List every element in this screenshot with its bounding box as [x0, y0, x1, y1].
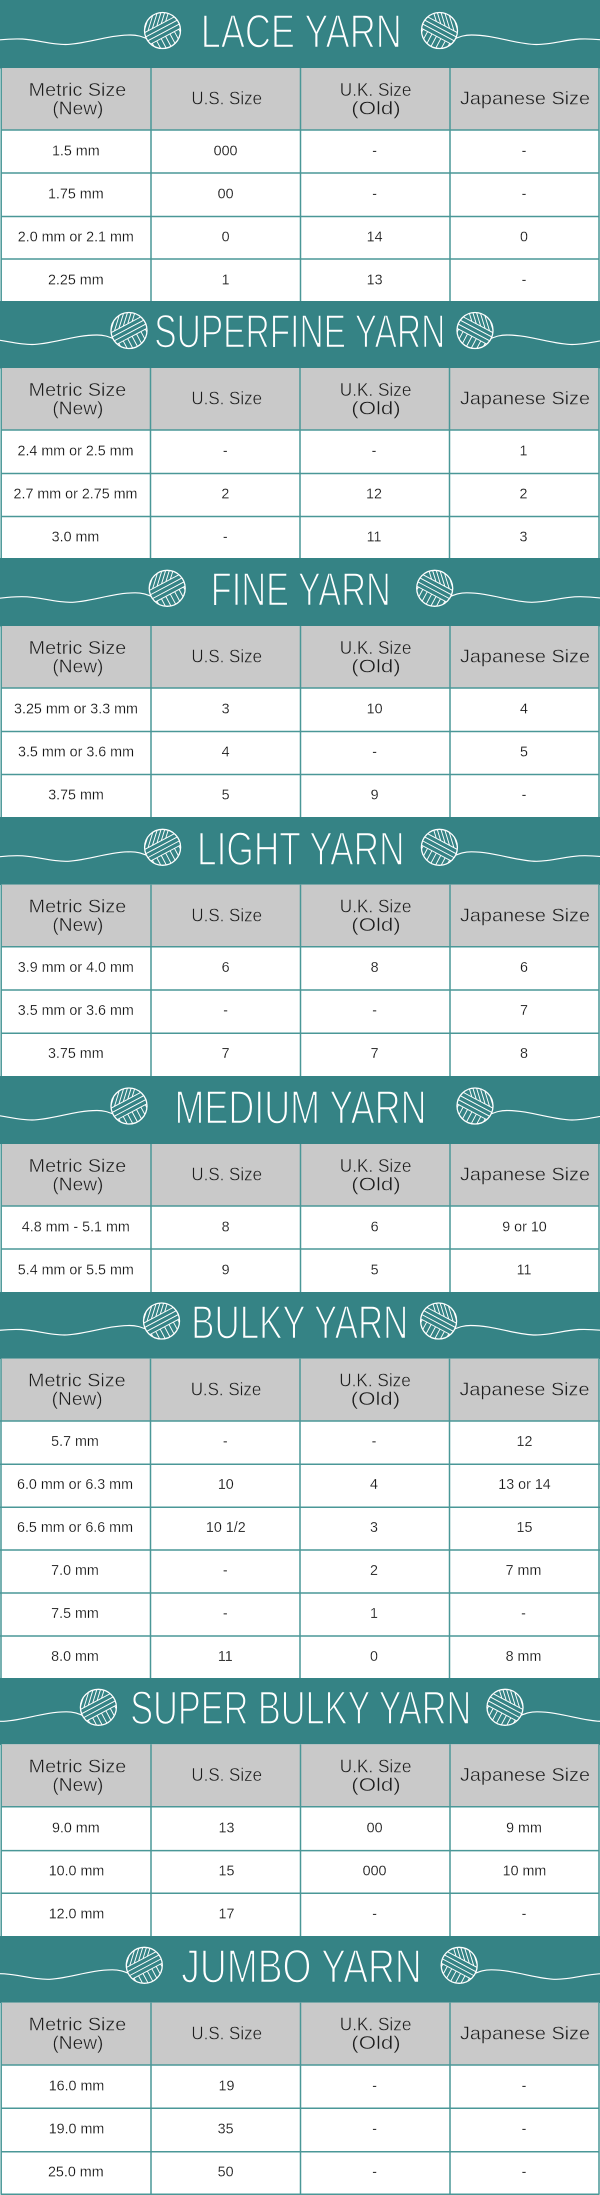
row: 1.75 mm: 1.75 mm: [48, 186, 104, 202]
row: 9.0 mm: 13: [219, 1820, 234, 1836]
row: 5.7 mm: [51, 1434, 532, 1450]
row: 12.0 mm: 17: [219, 1906, 234, 1922]
yarn strand left: [0, 1326, 146, 1335]
row: 8.0 mm: 11: [218, 1649, 233, 1665]
table: super bulky yarn: [1, 1744, 599, 1936]
header row: U.S. Size: [191, 1764, 262, 1785]
row: 1.75 mm: -: [522, 186, 527, 202]
row: 3.25 mm or 3.3 mm: 4: [520, 702, 528, 718]
icon: yarn ball left: [140, 560, 195, 615]
header row: [28, 1370, 590, 1409]
banner: light yarn: [0, 817, 600, 885]
table: lace yarn: [1, 68, 599, 301]
header row: U.K. Size: [340, 637, 411, 658]
table: light yarn: [1, 885, 599, 1076]
icon: yarn ball left: [135, 3, 190, 58]
row: 7.0 mm: [51, 1563, 541, 1579]
row: 1.5 mm: 1.5 mm: [52, 144, 100, 160]
row: 3.9 mm or 4.0 mm: 6: [222, 960, 230, 976]
header row: Japanese Size: [460, 1378, 590, 1399]
row: 2.25 mm: 13: [367, 272, 383, 288]
row: 5.7 mm: -: [372, 1434, 377, 1450]
heading: super bulky yarn: SUPER BULKY YARN: [130, 1681, 471, 1734]
row: 3.5 mm or 3.6 mm: [18, 1003, 528, 1019]
row: 12.0 mm: [49, 1906, 527, 1922]
row: 7.5 mm: -: [223, 1606, 228, 1622]
row: 9.0 mm: [52, 1820, 542, 1836]
header row: (Old): [351, 656, 401, 676]
row: 2.25 mm: -: [522, 272, 527, 288]
row: 3.5 mm or 3.6 mm: -: [372, 744, 377, 760]
row: 3.9 mm or 4.0 mm: 6: [520, 960, 528, 976]
row: 4.8 mm - 5.1 mm: 9 or 10: [502, 1220, 547, 1236]
row: 3.5 mm or 3.6 mm: 3.5 mm or 3.6 mm: [18, 744, 134, 760]
table: jumbo yarn: [1, 2003, 599, 2195]
row: 12.0 mm: 12.0 mm: [49, 1906, 104, 1922]
header row: U.K. Size: [340, 379, 411, 400]
header row: Metric Size: [29, 637, 126, 658]
row: 2.4 mm or 2.5 mm: 1: [520, 444, 528, 460]
row: 6.5 mm or 6.6 mm: 10 1/2: [206, 1520, 246, 1536]
row: 16.0 mm: -: [522, 2079, 527, 2095]
header row: (New): [52, 914, 103, 935]
header row: U.K. Size: [340, 2014, 411, 2035]
row: 6.5 mm or 6.6 mm: [17, 1520, 532, 1536]
header row: U.K. Size: [340, 896, 411, 917]
row: 2.4 mm or 2.5 mm: 2.4 mm or 2.5 mm: [18, 444, 134, 460]
panel: super bulky yarn: [0, 1678, 600, 1936]
yarn strand right: [491, 335, 600, 344]
yarn strand right: [491, 1110, 600, 1120]
heading: bulky yarn: BULKY YARN: [191, 1295, 408, 1348]
heading: light yarn: LIGHT YARN: [197, 822, 405, 875]
row: 7.5 mm: [51, 1606, 526, 1622]
row: 2.0 mm or 2.1 mm: 0: [520, 230, 528, 246]
panel: fine yarn: [0, 558, 600, 818]
panel: lace yarn: [0, 0, 600, 301]
row: 3.0 mm: -: [223, 530, 228, 546]
heading: superfine yarn: SUPERFINE YARN: [154, 304, 445, 357]
row: 6.0 mm or 6.3 mm: 13 or 14: [498, 1477, 551, 1493]
row: 3.75 mm: [48, 1046, 528, 1062]
heading: fine yarn: FINE YARN: [211, 562, 391, 616]
header row: U.K. Size: [340, 1755, 411, 1776]
row: 6.5 mm or 6.6 mm: 3: [370, 1520, 378, 1536]
row: 25.0 mm: [48, 2165, 527, 2181]
row: 8.0 mm: [51, 1649, 541, 1665]
row: 3.9 mm or 4.0 mm: 3.9 mm or 4.0 mm: [18, 960, 134, 976]
header row: Japanese Size: [460, 646, 590, 667]
row: 5.7 mm: 12: [517, 1434, 532, 1450]
row: 7.5 mm: 7.5 mm: [51, 1606, 99, 1622]
row: 2.4 mm or 2.5 mm: [18, 444, 528, 460]
header row: (Old): [351, 398, 401, 418]
row: 2.7 mm or 2.75 mm: 2: [520, 486, 528, 502]
row: 3.5 mm or 3.6 mm: -: [372, 1003, 377, 1019]
row: 2.4 mm or 2.5 mm: -: [223, 444, 228, 460]
header row: [29, 1155, 590, 1194]
header row: Metric Size: [29, 1755, 126, 1776]
header row: (New): [52, 1774, 103, 1795]
header row: U.S. Size: [191, 646, 262, 667]
row: 16.0 mm: -: [372, 2079, 377, 2095]
header row: (Old): [351, 2032, 401, 2053]
row: 3.75 mm: 7: [222, 1046, 230, 1062]
header row: U.S. Size: [191, 1378, 261, 1399]
icon: yarn ball right: [411, 819, 467, 874]
header row: (New): [52, 1174, 103, 1194]
header row: Metric Size: [29, 379, 126, 400]
row: 8.0 mm: 8.0 mm: [51, 1649, 99, 1665]
row: 9.0 mm: 00: [367, 1820, 383, 1836]
row: 1.75 mm: [48, 186, 527, 202]
row: 3.75 mm: 3.75 mm: [48, 1046, 104, 1062]
row: 2.7 mm or 2.75 mm: 2: [221, 486, 229, 502]
icon: yarn ball right: [411, 1293, 466, 1348]
row: 25.0 mm: 50: [218, 2165, 234, 2181]
header row: [29, 896, 590, 935]
header row: U.K. Size: [340, 1155, 411, 1176]
banner: fine yarn: [0, 558, 600, 626]
icon: yarn ball left: [134, 1293, 189, 1348]
header row: Metric Size: [29, 2014, 126, 2035]
header row: [29, 637, 590, 676]
header row: U.S. Size: [191, 388, 262, 409]
row: 5.4 mm or 5.5 mm: 5: [371, 1262, 379, 1278]
row: 19.0 mm: -: [372, 2122, 377, 2138]
row: 25.0 mm: -: [522, 2165, 527, 2181]
header row: Japanese Size: [460, 904, 590, 925]
row: 25.0 mm: 25.0 mm: [48, 2165, 104, 2181]
header row: [29, 379, 590, 418]
row: 7.5 mm: -: [521, 1606, 526, 1622]
header row: (New): [52, 398, 103, 418]
icon: yarn ball left: [102, 1078, 157, 1133]
row: 3.5 mm or 3.6 mm: 3.5 mm or 3.6 mm: [18, 1003, 134, 1019]
table: bulky yarn: [0, 1359, 600, 1678]
panel: light yarn: [0, 817, 600, 1076]
row: 25.0 mm: -: [372, 2165, 377, 2181]
row: 12.0 mm: -: [372, 1906, 377, 1922]
row: 3.5 mm or 3.6 mm: [18, 744, 528, 760]
row: 5.4 mm or 5.5 mm: 11: [517, 1262, 531, 1278]
row: 6.5 mm or 6.6 mm: 6.5 mm or 6.6 mm: [17, 1520, 133, 1536]
row: 6.0 mm or 6.3 mm: 4: [370, 1477, 378, 1493]
row: 6.0 mm or 6.3 mm: 10: [218, 1477, 234, 1493]
header row: [29, 79, 590, 118]
row: 5.4 mm or 5.5 mm: 9: [222, 1262, 230, 1278]
row: 2.25 mm: 2.25 mm: [48, 272, 104, 288]
row: 5.7 mm: 5.7 mm: [51, 1434, 99, 1450]
icon: yarn ball left: [71, 1679, 126, 1734]
header row: U.K. Size: [339, 1370, 411, 1391]
row: 6.0 mm or 6.3 mm: 6.0 mm or 6.3 mm: [17, 1477, 133, 1493]
header row: [29, 2014, 590, 2053]
panel: superfine yarn: [0, 301, 600, 558]
heading: jumbo yarn: JUMBO YARN: [181, 1940, 422, 1992]
header row: Japanese Size: [460, 1164, 590, 1185]
yarn strand left: [0, 852, 147, 861]
banner: bulky yarn: [0, 1292, 600, 1359]
row: 1.75 mm: -: [372, 186, 377, 202]
row: 6.5 mm or 6.6 mm: 15: [517, 1520, 532, 1536]
table: fine yarn: [1, 626, 599, 818]
banner: lace yarn: [0, 0, 600, 68]
row: 10.0 mm: 10.0 mm: [49, 1863, 104, 1879]
banner: jumbo yarn: [0, 1936, 600, 2003]
row: 6.0 mm or 6.3 mm: [17, 1477, 551, 1493]
row: 5.4 mm or 5.5 mm: [18, 1262, 531, 1278]
row: 19.0 mm: 35: [218, 2122, 234, 2138]
header row: (Old): [351, 98, 401, 118]
yarn strand right: [455, 1326, 600, 1335]
row: 3.0 mm: 11: [367, 530, 381, 546]
row: 1.5 mm: -: [522, 144, 527, 160]
row: 3.9 mm or 4.0 mm: 8: [371, 960, 379, 976]
icon: yarn ball right: [447, 1078, 502, 1133]
row: 3.75 mm: 9: [371, 788, 379, 804]
row: 12.0 mm: -: [522, 1906, 527, 1922]
row: 2.0 mm or 2.1 mm: 0: [222, 230, 230, 246]
row: 3.5 mm or 3.6 mm: 7: [520, 1003, 528, 1019]
row: 1.75 mm: 00: [218, 186, 234, 202]
banner: superfine yarn: [0, 301, 600, 368]
header row: U.S. Size: [191, 88, 262, 109]
row: 8.0 mm: 8 mm: [506, 1649, 541, 1665]
header row: Metric Size: [28, 1370, 126, 1391]
row: 10.0 mm: 15: [219, 1863, 234, 1879]
row: 3.0 mm: [52, 530, 528, 546]
row: 10.0 mm: 000: [363, 1863, 387, 1879]
row: 16.0 mm: [49, 2079, 527, 2095]
row: 3.25 mm or 3.3 mm: [14, 702, 528, 718]
header row: Japanese Size: [460, 2022, 590, 2043]
row: 2.4 mm or 2.5 mm: -: [372, 444, 377, 460]
heading: lace yarn: LACE YARN: [201, 4, 402, 57]
row: 5.4 mm or 5.5 mm: 5.4 mm or 5.5 mm: [18, 1262, 134, 1278]
row: 3.75 mm: 7: [371, 1046, 379, 1062]
panel: medium yarn: [0, 1076, 600, 1292]
yarn strand left: [0, 1970, 128, 1979]
icon: yarn ball left: [102, 303, 157, 358]
header row: (New): [52, 656, 103, 676]
header row: Metric Size: [29, 896, 126, 917]
row: 2.7 mm or 2.75 mm: [14, 486, 528, 502]
yarn strand right: [451, 593, 600, 602]
row: 3.25 mm or 3.3 mm: 3.25 mm or 3.3 mm: [14, 702, 138, 718]
row: 3.75 mm: -: [522, 788, 527, 804]
icon: yarn ball right: [407, 560, 462, 615]
row: 3.25 mm or 3.3 mm: 10: [367, 702, 383, 718]
row: 3.9 mm or 4.0 mm: [18, 960, 528, 976]
icon: yarn ball right: [447, 303, 502, 358]
header row: (Old): [351, 1174, 401, 1194]
header row: Japanese Size: [460, 1764, 590, 1785]
banner: super bulky yarn: [0, 1678, 600, 1745]
row: 7.0 mm: -: [223, 1563, 228, 1579]
banner: medium yarn: [0, 1076, 600, 1144]
icon: yarn ball left: [135, 819, 191, 874]
row: 3.75 mm: 5: [222, 788, 230, 804]
row: 2.25 mm: 1: [222, 272, 230, 288]
yarn strand left: [0, 335, 113, 344]
header row: (New): [52, 98, 103, 118]
row: 2.0 mm or 2.1 mm: 2.0 mm or 2.1 mm: [18, 230, 134, 246]
icon: yarn ball right: [412, 3, 467, 58]
header row: (New): [52, 1388, 103, 1409]
row: 4.8 mm - 5.1 mm: 4.8 mm - 5.1 mm: [22, 1220, 130, 1236]
table: medium yarn: [1, 1144, 599, 1292]
table: superfine yarn: [1, 368, 599, 558]
row: 1.5 mm: -: [372, 144, 377, 160]
row: 9.0 mm: 9 mm: [506, 1820, 542, 1836]
row: 19.0 mm: -: [522, 2122, 527, 2138]
heading: medium yarn: MEDIUM YARN: [174, 1080, 426, 1133]
row: 7.0 mm: 7.0 mm: [51, 1563, 99, 1579]
icon: yarn ball left: [117, 1937, 172, 1992]
yarn strand right: [455, 852, 600, 861]
row: 16.0 mm: 19: [219, 2079, 234, 2095]
row: 3.0 mm: 3: [520, 530, 528, 546]
row: 10.0 mm: 10 mm: [503, 1863, 546, 1879]
row: 3.5 mm or 3.6 mm: 5: [520, 744, 528, 760]
yarn strand left: [0, 593, 151, 602]
header row: U.S. Size: [191, 904, 262, 925]
row: 3.75 mm: 3.75 mm: [48, 788, 104, 804]
row: 3.0 mm: 3.0 mm: [52, 530, 99, 546]
row: 7.0 mm: 2: [370, 1563, 378, 1579]
row: 3.25 mm or 3.3 mm: 3: [222, 702, 230, 718]
header row: (Old): [351, 1774, 401, 1795]
row: 19.0 mm: [49, 2122, 527, 2138]
header row: [29, 1755, 590, 1795]
header row: Japanese Size: [460, 88, 590, 109]
yarn strand left: [0, 35, 146, 44]
panel: jumbo yarn: [0, 1936, 600, 2195]
row: 3.75 mm: 8: [520, 1046, 528, 1062]
header row: (Old): [351, 914, 401, 935]
header row: Metric Size: [29, 1155, 126, 1176]
row: 8.0 mm: 0: [370, 1649, 378, 1665]
yarn strand left: [0, 1712, 82, 1721]
row: 9.0 mm: 9.0 mm: [52, 1820, 100, 1836]
row: 4.8 mm - 5.1 mm: 6: [371, 1220, 379, 1236]
row: 2.25 mm: [48, 272, 527, 288]
row: 2.0 mm or 2.1 mm: 14: [367, 230, 383, 246]
row: 19.0 mm: 19.0 mm: [49, 2122, 104, 2138]
panel: bulky yarn: [0, 1292, 600, 1678]
header row: (New): [52, 2032, 103, 2053]
header row: U.S. Size: [191, 2022, 262, 2043]
yarn strand left: [0, 1110, 113, 1120]
yarn strand right: [475, 1970, 600, 1979]
header row: U.S. Size: [191, 1164, 262, 1185]
yarn strand right: [456, 35, 600, 44]
row: 16.0 mm: 16.0 mm: [49, 2079, 104, 2095]
header row: (Old): [351, 1388, 400, 1409]
row: 2.0 mm or 2.1 mm: [18, 230, 528, 246]
row: 10.0 mm: [49, 1863, 546, 1879]
row: 7.0 mm: 7 mm: [506, 1563, 541, 1579]
header row: Japanese Size: [460, 388, 590, 409]
header row: Metric Size: [29, 79, 126, 100]
yarn strand right: [521, 1712, 600, 1721]
row: 2.7 mm or 2.75 mm: 12: [366, 486, 382, 502]
row: 3.75 mm: [48, 788, 527, 804]
row: 5.7 mm: -: [223, 1434, 228, 1450]
row: 1.5 mm: 000: [214, 144, 238, 160]
row: 7.5 mm: 1: [370, 1606, 378, 1622]
row: 4.8 mm - 5.1 mm: 8: [222, 1220, 230, 1236]
icon: yarn ball right: [431, 1937, 486, 1992]
row: 3.5 mm or 3.6 mm: -: [223, 1003, 228, 1019]
row: 2.7 mm or 2.75 mm: 2.7 mm or 2.75 mm: [14, 486, 137, 502]
header row: U.K. Size: [340, 79, 411, 100]
row: 3.5 mm or 3.6 mm: 4: [222, 744, 230, 760]
icon: yarn ball right: [477, 1679, 532, 1734]
row: 4.8 mm - 5.1 mm: [22, 1220, 547, 1236]
row: 1.5 mm: [52, 144, 527, 160]
